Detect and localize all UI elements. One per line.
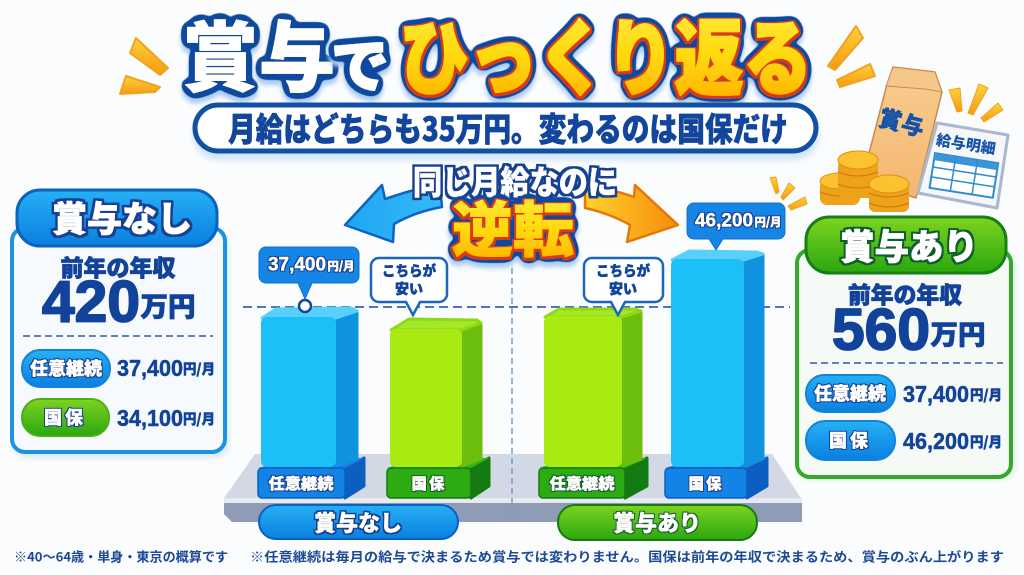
no bonus row: national health insurance: 円/月: [183, 409, 215, 429]
decorative sparks: near coins: [770, 177, 807, 210]
group label: with bonus: [558, 505, 757, 540]
blue arrow pointing left: [345, 185, 442, 242]
group label: no bonus: 賞与なし: [314, 506, 402, 538]
with bonus income: 前年の年収: [848, 276, 962, 310]
bar: NHI, with bonus 46,200: [671, 251, 763, 467]
footnote: assumptions: ※40〜64歳・単身・東京の概算です: [14, 546, 228, 566]
title: white part: 賞: [182, 0, 258, 107]
title: white part: 与: [259, 0, 335, 107]
title: [182, 0, 812, 112]
no bonus header: 賞与なし: [52, 192, 192, 242]
callout: cheaper, with bonus: こちらが: [596, 261, 650, 281]
no bonus income: 万円: [140, 286, 196, 324]
no bonus income: 420: [42, 270, 140, 334]
no bonus row: national health insurance: 34,100: [117, 405, 183, 431]
heading: reversal: 逆転: [452, 182, 574, 270]
no bonus row: national health insurance: 国保: [44, 404, 86, 430]
marker on reference line: [299, 300, 311, 312]
bar base: NHI, no bonus: [387, 458, 489, 498]
bar base: voluntary, with bonus: 任意継続: [550, 472, 615, 494]
no bonus row: voluntary continuation: [22, 350, 215, 387]
decorative sparks: around payslip: [949, 84, 1003, 122]
bar: voluntary, no bonus 37,400: [261, 308, 357, 467]
callout: 37,400: 円/月: [328, 258, 354, 274]
no bonus income: [42, 249, 196, 334]
with bonus row: national health insurance: [806, 421, 1002, 460]
callout: 46,200: 46,200: [695, 210, 753, 232]
no bonus row: voluntary continuation: 円/月: [183, 359, 215, 379]
callout: 46,200: [687, 203, 785, 250]
bar base: voluntary, no bonus: [258, 458, 364, 498]
with bonus row: national health insurance: 円/月: [970, 432, 1002, 452]
bar: NHI, no bonus 34,100: [390, 319, 481, 467]
illustration: bonus envelope: [862, 67, 942, 198]
callout: cheaper, no bonus: 安い: [395, 279, 423, 299]
callout: cheaper, with bonus: [584, 258, 663, 315]
illustration: bonus envelope: 賞与: [876, 99, 928, 143]
group label: no bonus: [259, 505, 458, 539]
with bonus income: 万円: [930, 314, 986, 352]
panel: no bonus: [12, 190, 229, 458]
bar base: NHI, with bonus: [665, 458, 767, 498]
no bonus row: voluntary continuation: 任意継続: [30, 355, 102, 381]
bar base: NHI, no bonus: 国保: [411, 472, 447, 494]
footnote: explanation: ※任意継続は毎月の給与で決まるため賞与では変わりません。国保は前年の年収で決まるため、賞与のぶん上がります: [250, 546, 1004, 566]
chart platform: [224, 454, 802, 522]
with bonus header: 賞与あり: [840, 220, 978, 270]
with bonus row: voluntary continuation: 37,400: [903, 381, 969, 407]
title: white part: で: [331, 20, 389, 104]
subtitle pill: 月給はどちらも35万円。変わるのは国保だけ: [228, 103, 788, 151]
bar base: NHI, with bonus: 国保: [688, 472, 724, 494]
with bonus row: national health insurance: 46,200: [903, 428, 969, 454]
bar base: voluntary, with bonus: [539, 458, 647, 498]
with bonus row: voluntary continuation: 円/月: [970, 385, 1002, 405]
no bonus income: 前年の年収: [60, 249, 176, 283]
callout: cheaper, no bonus: [371, 258, 447, 315]
decorative sparks: title left: [120, 38, 168, 94]
callout: 37,400: [259, 247, 359, 299]
bar base: voluntary, no bonus: 任意継続: [268, 472, 334, 494]
with bonus income: 560: [832, 298, 930, 362]
with bonus row: national health insurance: 国保: [829, 427, 871, 453]
panel: with bonus: [797, 217, 1016, 480]
heading: same salary: 同じ月給なのに: [413, 156, 617, 204]
illustration: payslip: [918, 123, 1008, 208]
callout: 46,200: 円/月: [754, 214, 782, 230]
with bonus row: voluntary continuation: [806, 375, 1002, 412]
with bonus header: [806, 217, 1006, 273]
callout: 37,400: 37,400: [268, 254, 326, 276]
no bonus header: [17, 190, 217, 246]
with bonus income: [832, 276, 986, 362]
no bonus row: national health insurance: [22, 399, 215, 436]
group label: with bonus: 賞与あり: [613, 506, 701, 538]
orange arrow pointing right: [585, 185, 678, 242]
with bonus row: voluntary continuation: 任意継続: [814, 380, 886, 406]
title: white part: [182, 0, 389, 107]
no bonus row: voluntary continuation: 37,400: [117, 355, 183, 381]
callout: cheaper, no bonus: こちらが: [382, 261, 436, 281]
illustration: payslip: 給与明細: [935, 129, 997, 159]
bar chart: [224, 203, 802, 540]
illustration: coin stacks: [820, 151, 909, 212]
callout: cheaper, with bonus: 安い: [609, 279, 637, 299]
decorative sparks: title right: [828, 26, 875, 87]
bar: voluntary, with bonus 37,400: [544, 309, 641, 467]
